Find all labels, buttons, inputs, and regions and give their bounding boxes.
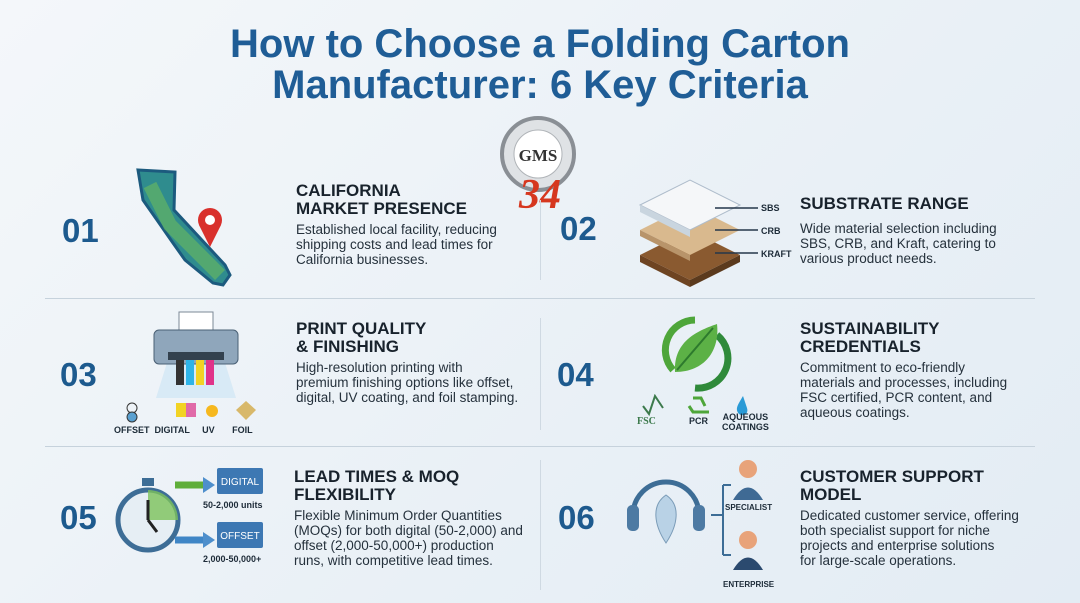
panel 02 xyxy=(560,180,997,287)
text 05: runs, with competitive lead times. xyxy=(294,553,493,568)
panel 05 xyxy=(60,467,523,568)
panel 01 xyxy=(62,168,497,287)
text 01: shipping costs and lead times for xyxy=(296,237,493,252)
text 04: CREDENTIALS xyxy=(800,337,921,356)
title: Manufacturer: 6 Key Criteria xyxy=(272,63,808,107)
text 04: FSC certified, PCR content, and xyxy=(800,390,992,405)
text 05: LEAD TIMES & MOQ xyxy=(294,467,459,486)
logo badge: GMS xyxy=(519,146,557,165)
icons: print methods xyxy=(114,401,256,435)
text 02: SUBSTRATE RANGE xyxy=(800,194,969,213)
text 02: various product needs. xyxy=(800,251,937,266)
panel 02: SBS xyxy=(761,203,780,213)
text 01: Established local facility, reducing xyxy=(296,222,497,237)
icons: certifications: PCR xyxy=(689,416,708,426)
icons: certifications: FSC xyxy=(637,416,656,427)
number 06: 06 xyxy=(558,499,595,536)
text 05: (MOQs) for both digital (50-2,000) and xyxy=(294,523,523,538)
text 03: High-resolution printing with xyxy=(296,360,463,375)
number 04: 04 xyxy=(557,356,594,393)
text 03 xyxy=(296,319,518,405)
panel 05: 2,000-50,000+ xyxy=(203,554,261,564)
icon: california map xyxy=(136,168,232,287)
panel 03 xyxy=(60,312,518,435)
text 05: Flexible Minimum Order Quantities xyxy=(294,508,502,523)
logo badge xyxy=(500,116,576,212)
number 02: 02 xyxy=(560,210,597,247)
text 03: premium finishing options like offset, xyxy=(296,375,513,390)
panel 02: KRAFT xyxy=(761,249,792,259)
text 01: MARKET PRESENCE xyxy=(296,199,467,218)
text 03: PRINT QUALITY xyxy=(296,319,426,338)
text 03: & FINISHING xyxy=(296,337,399,356)
icons: print methods: OFFSET DIGITAL UV FOIL xyxy=(114,425,253,435)
icon: headset with people xyxy=(627,460,763,570)
text 02 xyxy=(800,194,997,266)
number 05: 05 xyxy=(60,499,97,536)
panel 05: 50-2,000 units xyxy=(203,500,263,510)
text 06: both specialist support for niche xyxy=(800,523,990,538)
text 04: aqueous coatings. xyxy=(800,405,910,420)
text 06: CUSTOMER SUPPORT xyxy=(800,467,984,486)
panel 06: SPECIALIST xyxy=(725,503,772,512)
text 03: digital, UV coating, and foil stamping. xyxy=(296,390,518,405)
icon: recycle leaf xyxy=(662,316,732,392)
panel 04 xyxy=(557,316,1007,432)
text 04: materials and processes, including xyxy=(800,375,1007,390)
text 05: FLEXIBILITY xyxy=(294,485,396,504)
text 05 xyxy=(294,467,523,568)
text 01 xyxy=(296,181,497,267)
text 01: California businesses. xyxy=(296,252,428,267)
text 06: MODEL xyxy=(800,485,861,504)
icons: certifications xyxy=(637,394,769,432)
text 06: projects and enterprise solutions xyxy=(800,538,994,553)
panel 06 xyxy=(558,460,1019,589)
text 01: CALIFORNIA xyxy=(296,181,401,200)
icons: certifications: COATINGS xyxy=(722,422,769,432)
text 02: SBS, CRB, and Kraft, catering to xyxy=(800,236,996,251)
text 06: for large-scale operations. xyxy=(800,553,956,568)
text 06: Dedicated customer service, offering xyxy=(800,508,1019,523)
text 02: Wide material selection including xyxy=(800,221,997,236)
text 04 xyxy=(800,319,1007,420)
icon: printer xyxy=(154,312,238,398)
icon: stopwatch with arrows: DIGITAL xyxy=(221,477,260,488)
text 05: offset (2,000-50,000+) production xyxy=(294,538,494,553)
panel 06: ENTERPRISE xyxy=(723,580,774,589)
number 03: 03 xyxy=(60,356,97,393)
text 04: SUSTAINABILITY xyxy=(800,319,939,338)
title xyxy=(230,22,850,107)
number 01: 01 xyxy=(62,212,99,249)
icon: stopwatch with arrows: OFFSET xyxy=(220,531,260,542)
title: How to Choose a Folding Carton xyxy=(230,22,850,66)
icon: substrate layers xyxy=(639,180,758,287)
panel 02: CRB xyxy=(761,226,780,236)
text 06 xyxy=(800,467,1019,568)
icon: stopwatch with arrows xyxy=(116,468,263,552)
icons: certifications: AQUEOUS xyxy=(723,412,768,422)
text 04: Commitment to eco-friendly xyxy=(800,360,965,375)
